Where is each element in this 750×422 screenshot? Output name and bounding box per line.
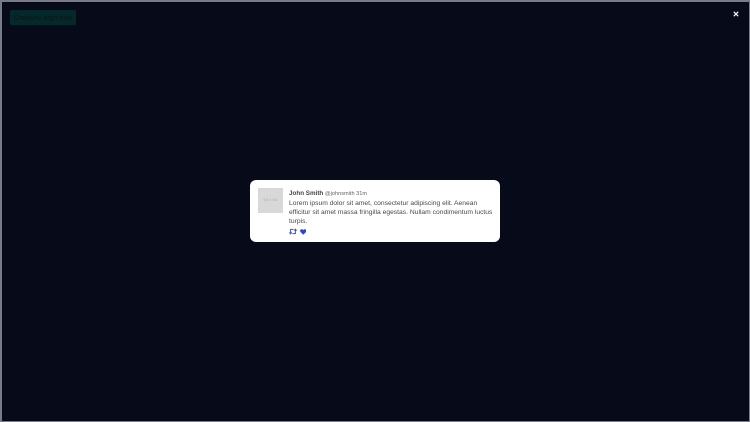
tweet card [250,180,500,242]
icon: heart [300,229,306,235]
tweet body text: efficitur sit amet massa fringilla egestas. Nullam condimentum luctus [289,209,492,216]
button: open card (dimmed behind overlay) [10,10,76,25]
button: open card (dimmed behind overlay): Открыть карточку [14,13,72,22]
icon: close [733,11,739,17]
avatar placeholder [258,188,283,213]
tweet body text [289,200,492,225]
avatar placeholder: 64 x 64 [264,198,277,202]
tweet body text: Lorem ipsum dolor sit amet, consectetur adipiscing elit. Aenean [289,200,477,206]
tweet body text: turpis. [289,218,307,225]
icon: retweet [289,228,297,235]
author line: John Smith @johnsmith 31m [289,190,367,196]
